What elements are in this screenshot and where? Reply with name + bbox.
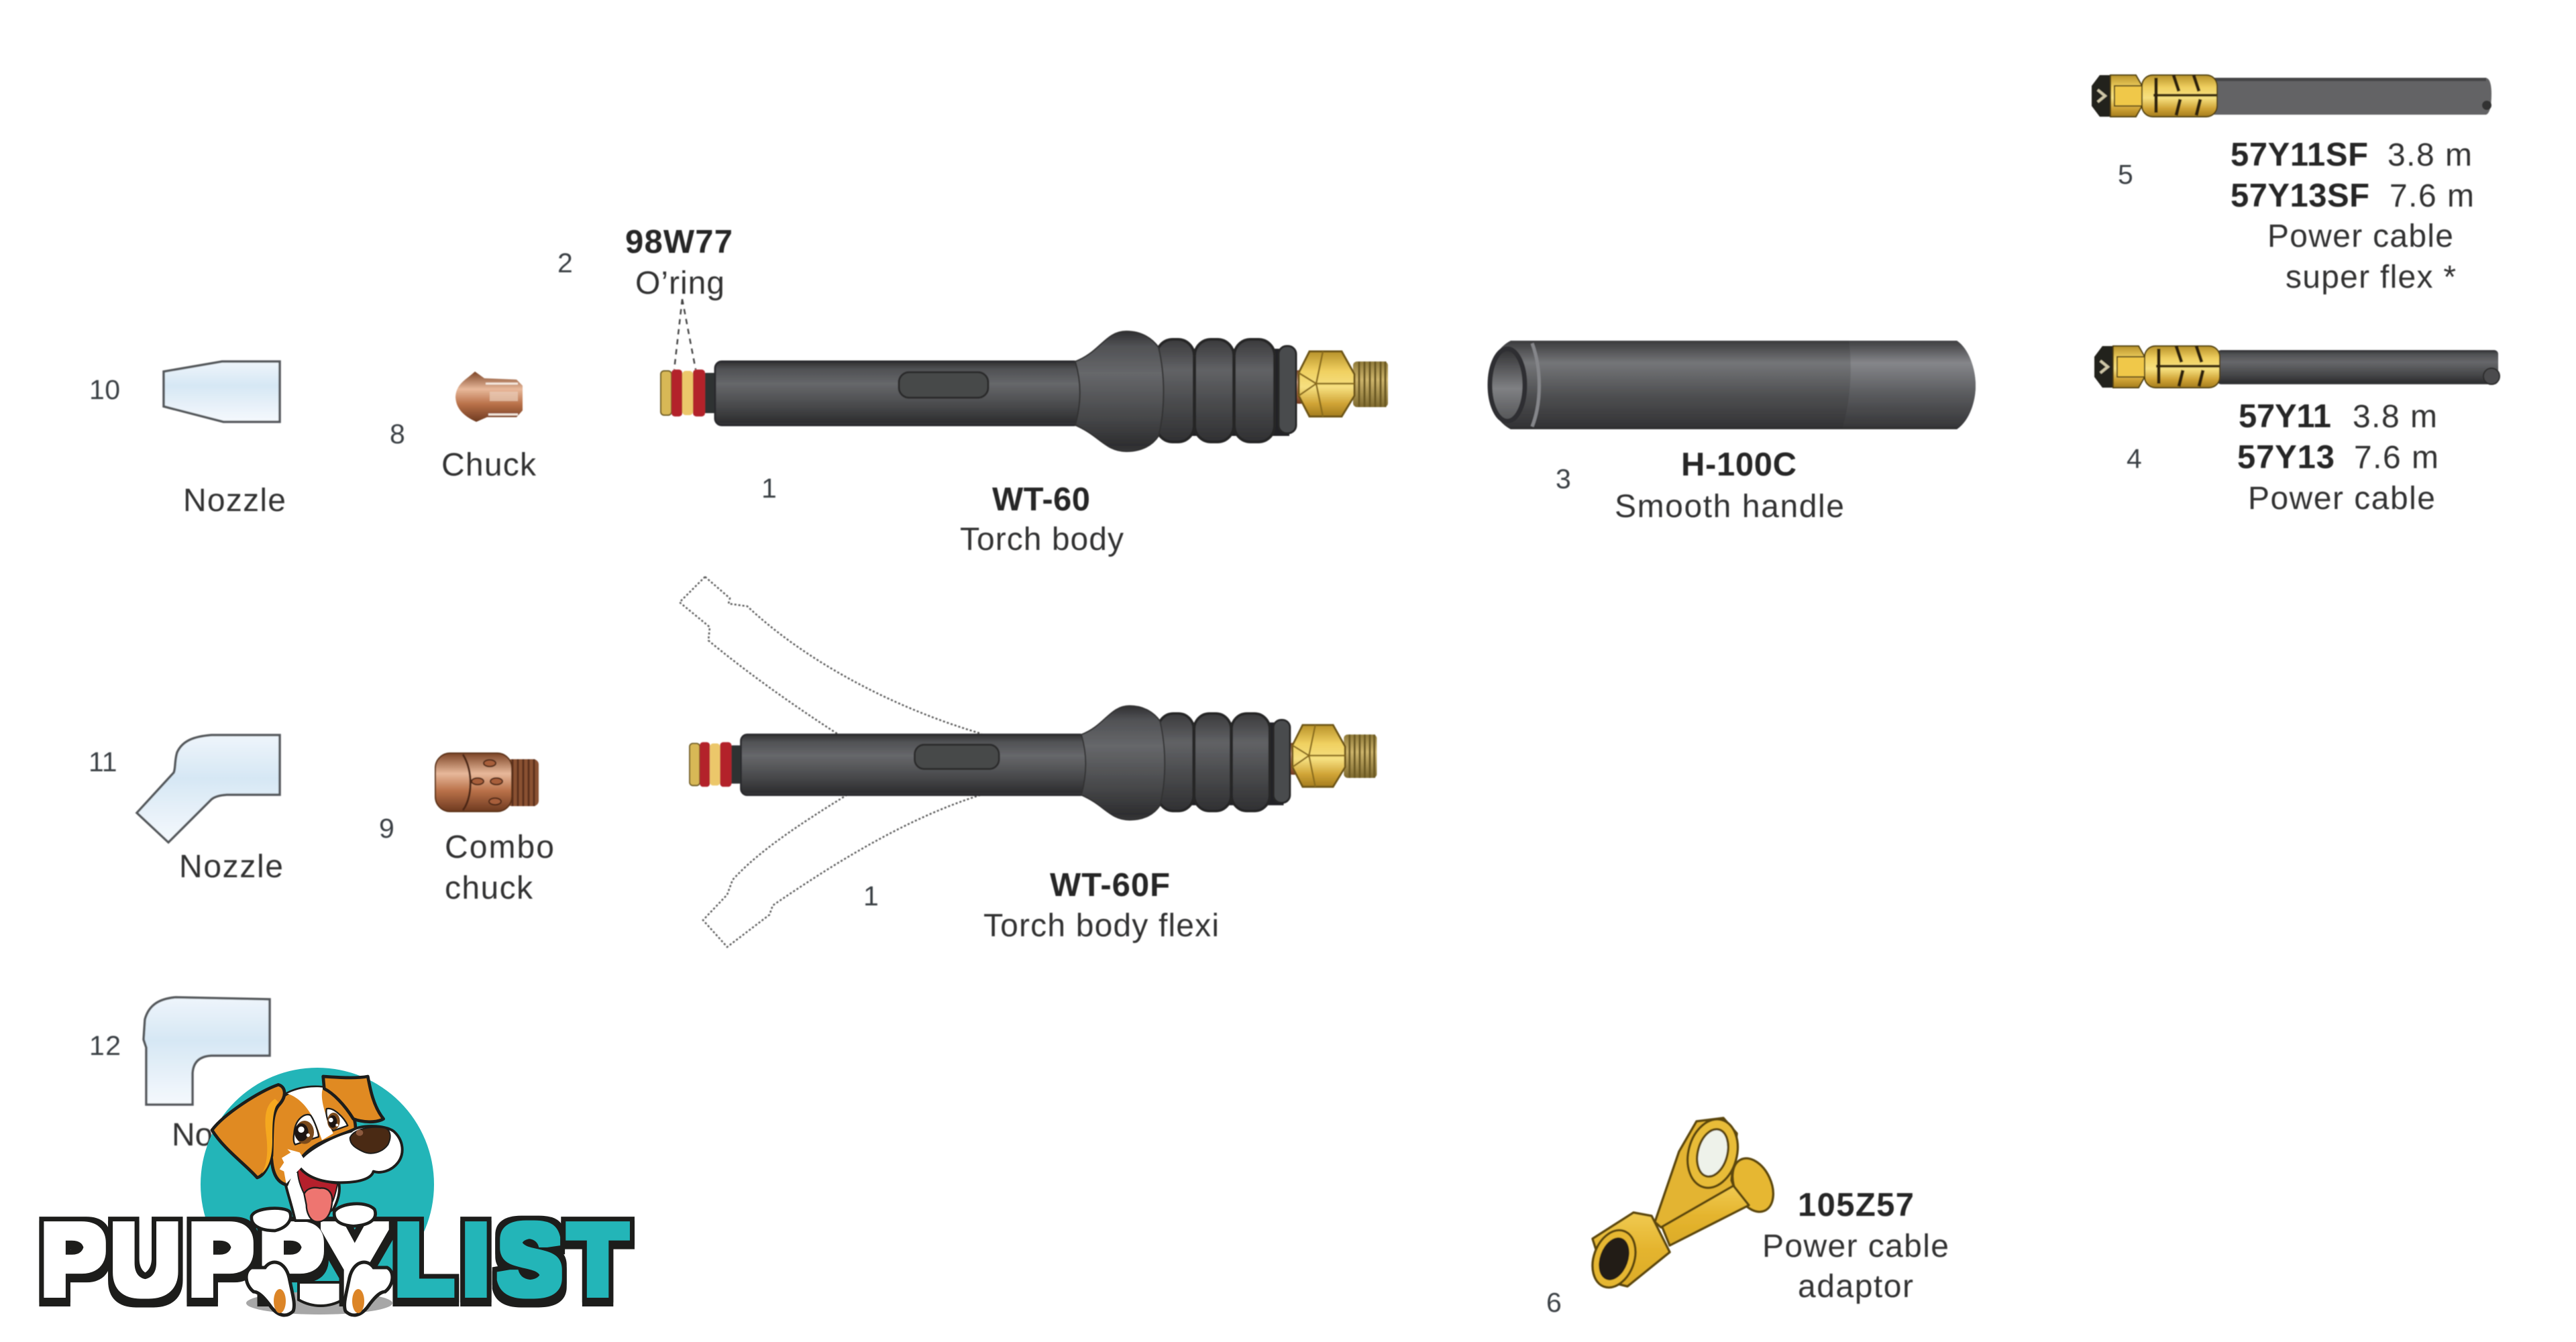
super flex power cable: 3.8 m	[2387, 137, 2472, 173]
tongue	[304, 1188, 332, 1222]
right-angle nozzle shape	[144, 997, 270, 1105]
number 10: 10	[89, 374, 120, 405]
neck	[283, 1172, 339, 1221]
cable illustration	[2092, 75, 2491, 117]
label: O’ring	[635, 266, 724, 301]
cheek fur	[280, 1149, 307, 1184]
mouth	[298, 1166, 337, 1209]
belly	[299, 1282, 343, 1306]
part number: 105Z57	[1798, 1187, 1914, 1223]
part number: 98W77	[625, 224, 733, 260]
o-ring callout	[557, 224, 733, 370]
head	[270, 1087, 356, 1185]
power cable	[2094, 346, 2500, 516]
part numbers and lengths: 57Y11SF	[2231, 137, 2368, 173]
torch illustration	[690, 706, 1377, 820]
nozzle label: Nozzle	[183, 483, 286, 518]
number 3: 3	[1556, 463, 1571, 494]
right front paw	[334, 1204, 376, 1226]
super flex power cable: 57Y13SF	[2231, 178, 2369, 214]
number 11: 11	[89, 746, 117, 777]
combo chuck label: Combo	[445, 830, 554, 865]
combo chuck icon	[435, 753, 539, 812]
left eye	[294, 1115, 319, 1145]
combo chuck 9	[379, 753, 554, 906]
part number: WT-60F	[1050, 867, 1170, 903]
left ear	[212, 1084, 284, 1178]
nozzle label: Nozzle	[172, 1117, 270, 1153]
label: Torch body	[960, 522, 1124, 557]
dashed leader lines	[674, 299, 696, 370]
left hind paw	[246, 1262, 294, 1315]
right hind paw	[345, 1262, 392, 1315]
PuppyList logo	[42, 1068, 627, 1315]
super flex power cable: 7.6 m	[2390, 178, 2474, 214]
wordmark: PUPPYLIST	[42, 1204, 627, 1315]
nozzle 11	[89, 735, 283, 885]
ground shadow	[246, 1292, 392, 1315]
angled nozzle shape	[137, 735, 280, 842]
number 4: 4	[2127, 443, 2142, 474]
part number: H-100C	[1681, 447, 1796, 483]
nozzle 10	[89, 361, 286, 518]
nozzle label: Nozzle	[179, 849, 283, 885]
number 2: 2	[557, 247, 573, 278]
muzzle	[299, 1126, 402, 1182]
number 8: 8	[390, 418, 405, 449]
part numbers and lengths: 57Y11	[2239, 398, 2331, 435]
super flex power cable	[2092, 75, 2491, 295]
chuck icon	[455, 372, 523, 422]
combo chuck 9: chuck	[445, 871, 533, 906]
smooth handle H-100C	[1488, 341, 1976, 524]
cable illustration	[2094, 346, 2500, 388]
power cable: 57Y13	[2237, 439, 2334, 476]
label: Torch body flexi	[983, 908, 1219, 944]
white blaze	[287, 1087, 333, 1140]
adaptor icon	[1585, 1113, 1781, 1294]
number 12: 12	[89, 1030, 121, 1061]
number 1: 1	[761, 473, 777, 504]
number 1: 1	[863, 881, 879, 911]
power cable adaptor	[1546, 1113, 1949, 1318]
label: Smooth handle	[1615, 489, 1844, 524]
torch body WT-60	[661, 331, 1388, 557]
handle illustration	[1488, 341, 1976, 429]
nozzle 12	[89, 997, 270, 1153]
number 5: 5	[2118, 159, 2133, 190]
power cable: 7.6 m	[2354, 440, 2438, 476]
power cable adaptor: adaptor	[1798, 1269, 1913, 1304]
part number: WT-60	[992, 482, 1090, 518]
nose	[350, 1127, 390, 1154]
torch illustration	[661, 331, 1388, 451]
label: Power cable	[2267, 219, 2453, 254]
chuck label: Chuck	[441, 447, 537, 483]
torch body flexi WT-60F	[680, 577, 1377, 947]
nozzle shape	[164, 361, 280, 422]
label: Power cable	[1762, 1229, 1949, 1264]
super flex power cable: super flex *	[2286, 260, 2456, 295]
chuck 8	[390, 372, 537, 483]
label: Power cable	[2248, 481, 2435, 516]
number 9: 9	[379, 813, 394, 844]
number 6: 6	[1546, 1287, 1562, 1318]
right eye	[326, 1109, 347, 1131]
teal circle	[201, 1068, 434, 1301]
left front paw	[252, 1209, 290, 1231]
right ear	[323, 1076, 384, 1122]
dotted flex outlines	[680, 577, 981, 947]
dog head	[212, 1076, 402, 1231]
power cable: 3.8 m	[2353, 399, 2437, 435]
